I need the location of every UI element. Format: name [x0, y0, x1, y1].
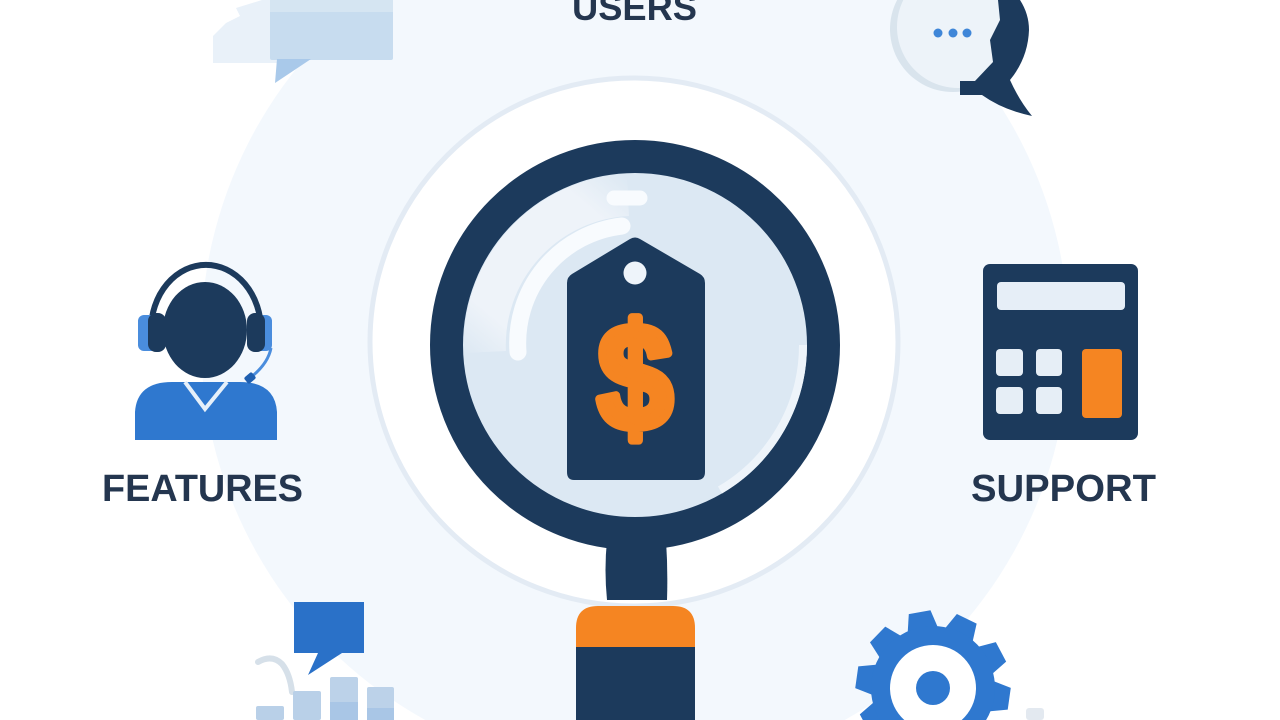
icon: calculator	[983, 264, 1138, 440]
label: support: SUPPORT	[971, 468, 1156, 510]
magnifier frame	[446, 156, 824, 534]
icon: bar chart with speech bubble	[256, 602, 394, 720]
magnifier handle neck	[606, 540, 667, 600]
price tag	[567, 238, 705, 480]
icon: message bubbles top left	[213, 0, 393, 83]
icon: support agent with headset	[135, 265, 277, 440]
label: features: FEATURES	[102, 468, 303, 510]
icon: magnifying glass	[446, 156, 824, 720]
icon: speech bubble top right	[890, 0, 1032, 116]
magnifier handle grip	[576, 606, 695, 720]
central white ring	[370, 78, 898, 606]
price tag hole	[624, 262, 646, 284]
lens highlights	[485, 195, 803, 490]
dollar sign: $	[597, 294, 673, 462]
decorative grey block by the gear	[1026, 708, 1044, 720]
background disc	[201, 0, 1069, 720]
icon: gear	[855, 609, 1011, 720]
